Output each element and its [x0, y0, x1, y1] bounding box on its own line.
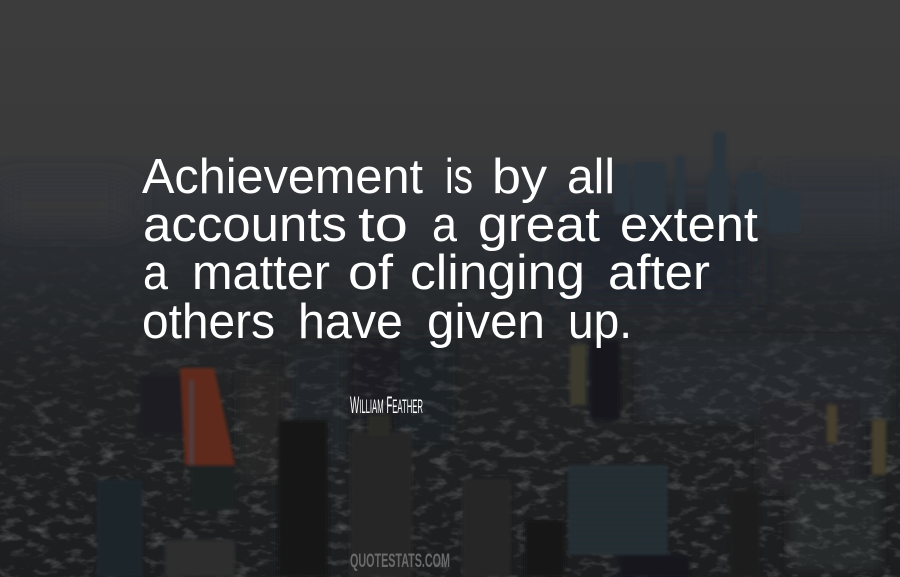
rooftop mottling — [0, 276, 900, 577]
quote line 2: accounts — [143, 198, 347, 252]
quote line 2: great — [478, 198, 600, 252]
quote line 4: have — [298, 295, 403, 349]
quote line 4: up. — [568, 295, 632, 349]
quote line 2 — [143, 198, 758, 252]
quote line 2: extent — [620, 198, 758, 252]
distant skyline towers — [614, 132, 800, 233]
quote line 1 — [142, 150, 615, 204]
quote line 3: a — [143, 246, 169, 300]
quote line 1: Achievement — [142, 150, 423, 204]
quote line 4: others — [142, 295, 275, 349]
quote line 1: all — [567, 150, 615, 204]
quote line 3: matter — [192, 246, 330, 300]
quote line 2: to — [358, 198, 408, 252]
quote line 4: given — [427, 295, 545, 349]
foreground towers — [97, 340, 886, 577]
quote line 3: after — [608, 246, 710, 300]
red building — [180, 368, 235, 510]
hazy horizon and water — [0, 170, 900, 305]
author name: WILLIAM FEATHER — [350, 392, 423, 419]
quote line 4 — [142, 295, 632, 349]
quote text — [142, 150, 758, 349]
quote line 2: a — [432, 198, 458, 252]
quote line 3: of — [348, 246, 393, 300]
quote line 1: by — [492, 150, 548, 204]
city blocks — [240, 340, 890, 570]
site watermark: QUOTESTATS.COM — [350, 551, 450, 572]
quote line 3 — [143, 246, 710, 300]
quote line 1: is — [445, 150, 473, 204]
quote line 3: clinging — [410, 246, 585, 300]
